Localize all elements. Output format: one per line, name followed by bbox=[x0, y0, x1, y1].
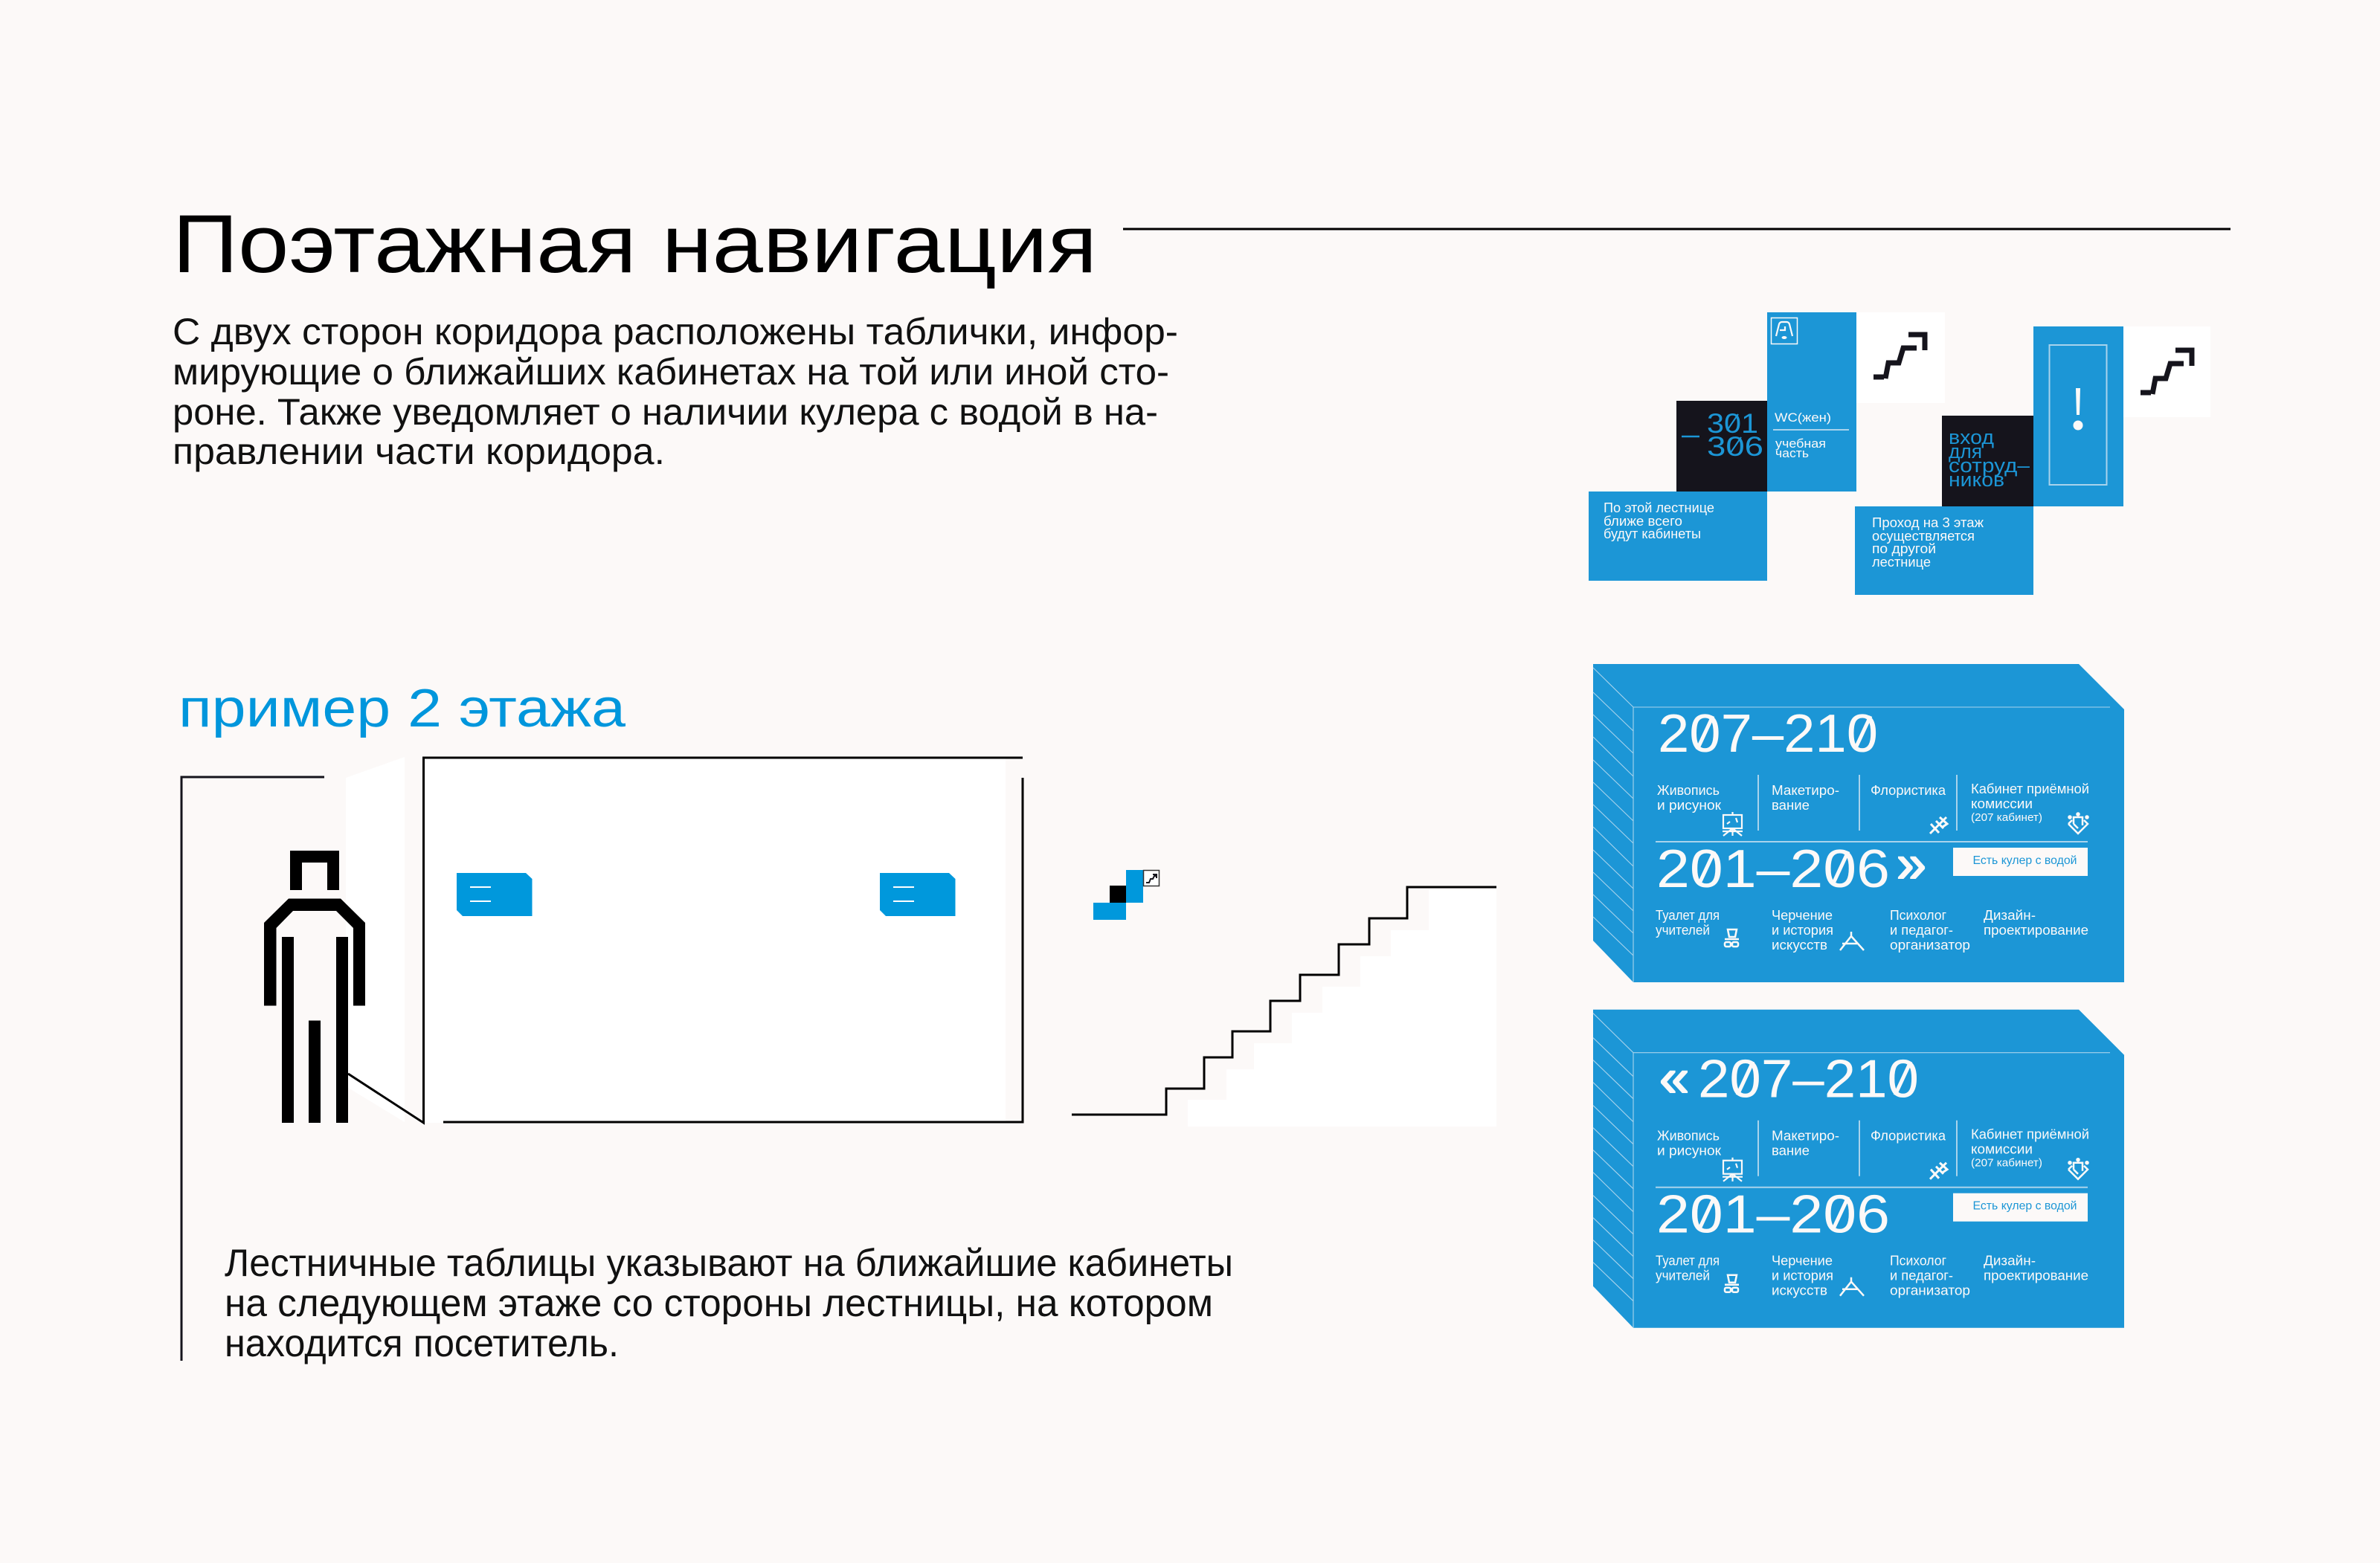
intro text block: мирующие о ближайших кабинетах на той или иной сто- bbox=[173, 351, 1169, 393]
sign set: cabinets 301–306: учебная bbox=[1775, 436, 1826, 451]
icon: exclamation mark bbox=[2074, 388, 2082, 430]
panel: sign box 2: учителей bbox=[1656, 1269, 1710, 1283]
panel: sign box 1: Дизайн- bbox=[1984, 908, 2036, 923]
sign set: cabinets 301–306: 301 bbox=[1707, 408, 1758, 439]
panel: sign box 1: комиссии bbox=[1971, 796, 2033, 811]
icon: admissions diamond bbox=[2068, 1158, 2088, 1179]
panel: sign box 1: организатор bbox=[1890, 938, 1970, 953]
bottom text block: Лестничные таблицы указывают на ближайшие кабинеты bbox=[225, 1242, 1233, 1285]
icon: toilet bbox=[1725, 929, 1739, 947]
icon: compass bbox=[1840, 932, 1864, 950]
icon: easel bbox=[1723, 1158, 1743, 1182]
sign set: staff entrance: вход bbox=[1949, 426, 1994, 448]
wall panel bbox=[423, 758, 1006, 1123]
panel: sign box 2: Живопись bbox=[1657, 1129, 1720, 1144]
icon: toilet bbox=[1725, 1275, 1739, 1292]
heading: rooms 201–206: » bbox=[1897, 834, 1926, 894]
heading: rooms 207–210 with arrow: « bbox=[1659, 1048, 1689, 1108]
sign set: staff entrance: лестнице bbox=[1872, 555, 1931, 570]
sign set: cabinets 301–306 bbox=[1589, 312, 1945, 581]
heading: rooms 201–206: 201–206 bbox=[1656, 839, 1890, 899]
panel: sign box 1: искусств bbox=[1772, 938, 1827, 953]
sign set: staff entrance bbox=[1855, 326, 2210, 595]
panel: sign box 2: Макетиро- bbox=[1772, 1129, 1839, 1144]
icon: stairs bbox=[2141, 350, 2192, 394]
panel: sign box 1: Психолог bbox=[1890, 908, 1946, 923]
button: water cooler bbox=[1953, 848, 2088, 876]
panel: sign box 2: и рисунок bbox=[1657, 1144, 1721, 1158]
corridor scene bbox=[181, 757, 1023, 1361]
sign set: cabinets 301–306: часть bbox=[1775, 446, 1809, 460]
intro text block: правлении части коридора. bbox=[173, 431, 665, 472]
title: Поэтажная навигация bbox=[173, 199, 1097, 290]
button: water cooler: Есть кулер с водой bbox=[1972, 1200, 2077, 1213]
panel: sign box 1: Черчение bbox=[1772, 908, 1833, 923]
sign set: cabinets 301–306: По этой лестнице bbox=[1604, 500, 1714, 515]
panel: sign box 2: вание bbox=[1772, 1144, 1810, 1158]
panel: sign box 2: Кабинет приёмной bbox=[1971, 1127, 2089, 1142]
icon: compass bbox=[1840, 1277, 1864, 1296]
sign set: cabinets 301–306: ближе всего bbox=[1604, 514, 1682, 529]
panel: sign box 1: вание bbox=[1772, 798, 1810, 813]
intro text block: роне. Также уведомляет о наличии кулера с водой в на- bbox=[173, 391, 1158, 433]
button: water cooler bbox=[1953, 1193, 2088, 1222]
intro text block: С двух сторон коридора расположены таблички, инфор- bbox=[173, 311, 1178, 352]
icon: easel bbox=[1723, 812, 1743, 836]
icon: admissions diamond bbox=[2068, 813, 2088, 834]
panel: sign box 2: Флористика bbox=[1871, 1129, 1946, 1144]
door leaf bbox=[346, 757, 405, 1122]
panel: sign box 2 bbox=[1593, 1010, 2124, 1328]
panel: sign box 1: Живопись bbox=[1657, 783, 1720, 798]
panel: sign box 2: проектирование bbox=[1984, 1269, 2088, 1283]
section heading: пример 2 этажа bbox=[178, 679, 626, 738]
sign set: staff entrance: ников bbox=[1949, 468, 2004, 491]
panel: sign box 1: Макетиро- bbox=[1772, 783, 1839, 798]
button: water cooler: Есть кулер с водой bbox=[1972, 854, 2077, 867]
sign set: staff entrance: по другой bbox=[1872, 541, 1936, 556]
panel: sign box 2: Черчение bbox=[1772, 1254, 1833, 1269]
icon: stairs bbox=[1874, 335, 1925, 378]
panel: sign box 2: Психолог bbox=[1890, 1254, 1946, 1269]
panel: sign box 1: учителей bbox=[1656, 923, 1710, 938]
bottom text block: находится посетитель. bbox=[225, 1322, 619, 1365]
panel: sign box 1: и рисунок bbox=[1657, 798, 1721, 813]
person bbox=[264, 851, 365, 1123]
sign set: staff entrance: для bbox=[1949, 440, 1982, 463]
bottom text block: на следующем этаже со стороны лестницы, на котором bbox=[225, 1282, 1213, 1325]
bottom text block bbox=[225, 1242, 1233, 1365]
stair sign small icon bbox=[1093, 870, 1159, 920]
panel: sign box 2: Туалет для bbox=[1656, 1254, 1720, 1269]
icon: female restroom bbox=[1772, 318, 1797, 344]
icon: flower bbox=[1930, 1163, 1947, 1179]
panel: sign box 2: организатор bbox=[1890, 1283, 1970, 1298]
sign set: cabinets 301–306: 306 bbox=[1707, 431, 1763, 462]
panel: sign box 2: и педагог- bbox=[1890, 1269, 1953, 1283]
panel: sign box 2: искусств bbox=[1772, 1283, 1827, 1298]
sign set: cabinets 301–306: WC(жен) bbox=[1775, 410, 1831, 425]
sign: left bbox=[457, 873, 533, 916]
panel: sign box 2: Дизайн- bbox=[1984, 1254, 2036, 1269]
sign set: cabinets 301–306: будут кабинеты bbox=[1604, 526, 1701, 541]
heading: rooms 207–210: 207–210 bbox=[1658, 704, 1878, 764]
panel: sign box 1 bbox=[1593, 664, 2124, 982]
heading: rooms 201–206: 201–206 bbox=[1656, 1185, 1890, 1245]
panel: sign box 1: и история bbox=[1772, 923, 1833, 938]
panel: sign box 1: проектирование bbox=[1984, 923, 2088, 938]
panel: sign box 2: комиссии bbox=[1971, 1142, 2033, 1157]
panel: sign box 2: (207 кабинет) bbox=[1971, 1157, 2042, 1170]
icon: flower bbox=[1930, 817, 1947, 834]
sign set: staff entrance: сотруд– bbox=[1949, 454, 2030, 477]
panel: sign box 1: (207 кабинет) bbox=[1971, 811, 2042, 824]
panel: sign box 1: Кабинет приёмной bbox=[1971, 782, 2089, 796]
panel: sign box 2: и история bbox=[1772, 1269, 1833, 1283]
sign set: staff entrance: осуществляется bbox=[1872, 529, 1975, 544]
intro text block bbox=[173, 311, 1178, 472]
sign: right bbox=[880, 873, 955, 916]
sign set: staff entrance: Проход на 3 этаж bbox=[1872, 515, 1984, 530]
panel: sign box 1: Туалет для bbox=[1656, 908, 1720, 923]
staircase bbox=[1072, 887, 1496, 1127]
panel: sign box 1: Флористика bbox=[1871, 783, 1946, 798]
panel: sign box 1: и педагог- bbox=[1890, 923, 1953, 938]
heading: rooms 207–210 with arrow: 207–210 bbox=[1698, 1050, 1919, 1109]
